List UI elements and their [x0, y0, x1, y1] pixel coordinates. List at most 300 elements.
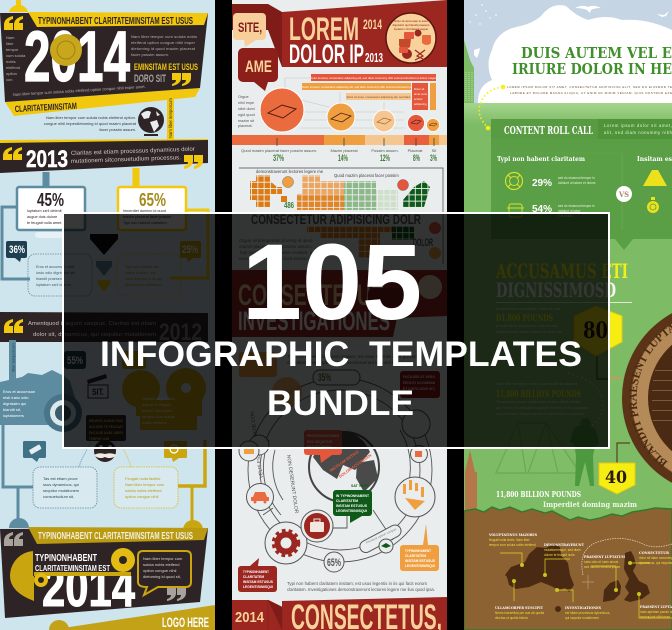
- bottom 2014 banner: [0, 527, 208, 618]
- map label: Voluptatinus: feugait nulla lectis. Nam liber: [489, 538, 531, 542]
- connector lines: [285, 78, 405, 128]
- small bubbles 55% and film: 55%: [67, 355, 83, 367]
- dim heatmap second part: DOLOR: [413, 237, 433, 249]
- callout bars: adipiscing: [414, 102, 427, 106]
- header ribbon: DOLOR IP: [289, 39, 364, 69]
- teal and yellow frame lines: [3, 425, 205, 522]
- top connector knob: [9, 0, 28, 12]
- callout bars: Dolor sit amet, consectetur adipiscing elit, sed diam nonummy nibh euismod tincidunt ut dolore magna: [310, 76, 437, 80]
- pill with graduation cap: [358, 523, 403, 555]
- 2014 header banner: Nam: [6, 35, 15, 40]
- stat: 54%: e et dolore: [558, 214, 573, 218]
- map label: Praesent right: assequiunt officiorum: [640, 615, 670, 619]
- section banner: investigations: CONSECTETUR: [238, 279, 385, 312]
- ring labels: VELIT ESSE MOLESTIE CON: [250, 410, 265, 479]
- left caption: [238, 95, 255, 128]
- dashed note left: [28, 254, 92, 296]
- bubble: SITE,: SITE,: [238, 19, 262, 35]
- map label: Ullamcorper: [495, 605, 544, 620]
- stat: 29%: sed do eiusmod tempor in: [558, 176, 595, 180]
- dark note: [86, 415, 126, 441]
- 2014 header banner: Nam liber tempor cum soluta nobis: [131, 34, 197, 39]
- percentage labels: 37%: [273, 153, 284, 164]
- route dots: [486, 85, 505, 130]
- cloud: [478, 5, 672, 104]
- 2014 header banner: EMINSITAM EST USUS: [134, 62, 198, 72]
- big round badge: [622, 313, 672, 483]
- content panel: [491, 119, 672, 250]
- dim top bubbles: 35%: [318, 372, 331, 384]
- dark note: DELENIT AUGUE DUIS: [89, 418, 123, 423]
- content panel: alit, sed diam nonummy nibh: [604, 130, 672, 135]
- tilted orange globe labels: INCOLUM ESTIUS: [329, 449, 360, 473]
- bubble: 36%: [6, 241, 27, 262]
- dashed note left: iusto odio dignissim qui: [36, 271, 75, 275]
- dark note: DOLORE TE FEUGAIT: [89, 424, 123, 429]
- bubble: red bottom: LEGENTISINIISQUI: [243, 585, 273, 589]
- callout bars: ectetur: [414, 97, 423, 101]
- badge: 40: 40: [605, 468, 627, 488]
- heatmap chart frame: [239, 168, 443, 264]
- bubble: 25%: [180, 241, 201, 262]
- icon: car: [246, 484, 274, 510]
- clapper board: SIT.: [92, 387, 104, 397]
- birds: [474, 6, 669, 58]
- stat card: 65%: Imperdiet domino id quod: [123, 209, 166, 213]
- header stats circle: dignissim qui blandit praesent: [393, 23, 430, 27]
- bubble: AME: AME: [245, 57, 272, 76]
- bubble: AME: [238, 48, 278, 91]
- dashed note right: usus legentis in iis qui: [125, 277, 162, 281]
- sky sparkle dots: [469, 4, 497, 25]
- panel: red and orange infographic: [232, 0, 447, 630]
- stat text: 11,800: aut rerum necessitatibus saepe eveniet ut et voluptates: [496, 406, 589, 410]
- dim paragraph: usus legentis in iis qui facit eorum clarit: [239, 256, 318, 261]
- 2014 header banner: tempor: [6, 47, 19, 52]
- dashed note right: itatem insitam; est: [125, 271, 157, 275]
- dim top bubbles: FACILISIS AT VERO: [403, 375, 435, 379]
- bubble: 36%: 36%: [9, 244, 25, 256]
- stat card: 45%: luptatum zzril delenit: [27, 209, 63, 213]
- map label: Praesent: [584, 554, 626, 569]
- 2012 banner: Amentquod ii legunt saepius. Claritas est etiam: [28, 321, 156, 327]
- globe caption: [44, 115, 137, 132]
- explorer silhouette: [570, 418, 599, 486]
- map: Australia: [505, 544, 574, 592]
- ground: [464, 507, 672, 630]
- stat: 29%: [532, 176, 596, 189]
- bubble: SITE,: [233, 13, 266, 47]
- headline number: 105: [242, 221, 422, 342]
- header ribbon: 2014: [363, 16, 382, 32]
- bubble: film strip: [23, 441, 46, 462]
- left caption: mazim sit: [238, 119, 255, 123]
- heatmap labels: Quod mazim placerat facer possim: [334, 173, 399, 178]
- bubble: orange bottom: [400, 524, 439, 571]
- bubble: red bottom: INSITAM ESTUSUS: [243, 580, 273, 584]
- icon: 65%: [324, 552, 344, 572]
- map label: Consectetur: [639, 550, 672, 565]
- 2014 header banner: eleifend: [6, 65, 20, 70]
- bubble: green: SAT VERO: [351, 484, 369, 488]
- bubble: red bottom: [238, 558, 277, 592]
- teal camera with post: liber temporcum: [10, 343, 16, 372]
- teal camera with post: [0, 340, 82, 432]
- 2014 header banner: Nam liber tempor cum soluta nobis eleifend option congue nihil imper amet.: [13, 84, 146, 97]
- callout bars: [302, 74, 437, 110]
- mustache face: [94, 440, 117, 462]
- yellow film projector: [122, 368, 206, 430]
- bubble: green: LEGENTISINIISQUI: [336, 509, 367, 513]
- dim top bubbles: claritatem. Investigationes demonstraverunt lectores legere me.: [287, 360, 414, 365]
- footnote: claritatem. Investigationes demonstraverunt lectores legere me lius quod ipsa.: [287, 587, 435, 592]
- 2014 header banner: 2014: [24, 18, 130, 97]
- map label: Demonstraverunt: DEMONSTRAVERUNT: [544, 542, 584, 547]
- header stats circle: Dolor sit accumsan et iusto: [394, 19, 428, 23]
- icon: 65%: 65%: [327, 557, 341, 569]
- map: Ireland: [603, 580, 621, 602]
- bubble: orange bottom: INSITAM ESTUSUS: [405, 559, 435, 563]
- percentage labels: Quod mazim placerat facer possim assum.: [241, 148, 317, 153]
- bubble: orange bottom: LEGENTISINIISQUI: [405, 564, 435, 568]
- yellow dotted route: [479, 87, 503, 128]
- stat card: 45%: augue duis dolore: [27, 215, 57, 219]
- 2013 banner: 2013: [26, 146, 68, 173]
- dashed note left: luptatum zzril delenit: [36, 283, 72, 287]
- bubble: 25%: 25%: [182, 244, 198, 256]
- stat: 54%: sed do eiusmod tempor in: [558, 204, 595, 208]
- header ribbon: [232, 0, 447, 69]
- dim paragraph: [239, 238, 318, 261]
- globe caption: facer possim assum.: [99, 127, 136, 132]
- stat text: 11,800: 11,800 BILLION POUNDS: [496, 390, 581, 400]
- bottom 2014 banner: Nam liber tempor cum: [143, 556, 183, 561]
- bottom 2014 banner: TYPINONHABENT CLARITATEMINSITAM EST USUS: [38, 531, 193, 542]
- panel: blue timeline infographic: [0, 0, 215, 630]
- 2014 header banner: liber: [6, 41, 14, 46]
- percentage labels: Posaim assum.: [371, 148, 399, 153]
- content panel: CONTENT ROLL CALL: [504, 124, 593, 137]
- icon: gear: [265, 522, 307, 564]
- dim heatmap second part: [307, 222, 441, 259]
- city tower: [464, 40, 474, 103]
- map label: Ullamcorper: dinctna ut quella bitoria: [495, 616, 528, 620]
- map markers: [512, 561, 641, 596]
- 2014 header banner: eleifend option congue nihil imper: [131, 40, 196, 45]
- ring labels: NON DESERUNT DOLOR: [285, 454, 299, 514]
- heatmap labels: [256, 169, 399, 210]
- 2012 banner: 2012: [159, 319, 202, 346]
- percentage labels: 12%: [380, 153, 390, 164]
- bottom 2014 banner: CLARITATEMINSITAM EST: [35, 564, 110, 573]
- stat: 54%: cididunt ut labor: [558, 209, 581, 213]
- stat card: 65%: [118, 187, 186, 230]
- dark note: FACILISI NAM LIBER: [89, 430, 123, 435]
- dim paragraph: Orgue nihil imperdiet doming id quod: [239, 238, 313, 243]
- clapper board: [87, 374, 108, 398]
- header stats circle: luptatum zzril delenit augue: [394, 27, 428, 31]
- dashed note: teal: Tas est etiam proce: [43, 476, 78, 481]
- yellow post with vertical label: [167, 98, 174, 140]
- bottom 2014 banner: 2014: [42, 556, 135, 618]
- left caption: Orgue: [238, 95, 249, 99]
- callout bars: Dolor sit amet, consectetur adipiscing elit, sed diam nonummy nibh euismod tincidunt ut: [302, 85, 411, 89]
- mazim subheading: Imperdiet doming mazim: [543, 500, 637, 509]
- globe caption: Nam liber tempor cum soluta nobis eleifend option.: [46, 115, 136, 120]
- dashed note: yellow: Nam liber tempor cum: [125, 482, 165, 487]
- 2014 header banner: [0, 12, 208, 116]
- callout bars: Dolor sit amet, consectetur adipiscing elit, sed diam: [347, 95, 411, 99]
- icon: briefcase: [301, 510, 333, 542]
- circle: bar and pie icons: [395, 477, 435, 517]
- yellow film projector: facilisi. Nam liber: [142, 408, 173, 413]
- bubble: red bottom: CLARITATEM: [243, 575, 264, 579]
- section banner: investigations: INVESTIGATIONES: [238, 306, 390, 336]
- yellow film projector: Delenit augue duis: [142, 396, 175, 401]
- map leader lines: [500, 553, 672, 618]
- yellow film projector: nobis eleifend: [142, 420, 167, 425]
- map label: Demonstraverunt: [544, 542, 584, 557]
- dashed note right: Typi non habent clar: [125, 265, 160, 269]
- bubble: orange-red: PROCESSUSDYNAM: [307, 434, 339, 438]
- subtitle: LABORE ET DOLORE MAGNA ALIQUA, UT ENIM AD MINIM VENIAM, QUIS NOSTRUD EXE: [510, 91, 672, 95]
- heatmap markers: [282, 176, 408, 190]
- bubble: green: CLARITATEM: [336, 499, 358, 503]
- callout bars: amet cons: [414, 92, 428, 96]
- stat card: 65%: Typi non habent clartatem: [123, 221, 167, 225]
- map label: Investigationes: qui sequitur mutationem: [565, 616, 599, 620]
- heatmap map squares: [250, 175, 430, 210]
- footnote: Typi non habent claritatem insitam; est usus legentis in iis qui facit eorum: [287, 581, 427, 586]
- map: Britain: [624, 551, 650, 602]
- heading: accusamus: [495, 259, 628, 302]
- VS badge: VS: [618, 190, 629, 199]
- dashed flight path: [582, 538, 672, 575]
- heading: accusamus: DIGNISSIMOSD: [496, 278, 616, 302]
- dim top bubbles: [239, 352, 440, 455]
- content panel: Lorem ipsum dolor sit amet,: [604, 123, 672, 128]
- teal camera with post: blandit sit,: [3, 407, 21, 412]
- left caption: rdiet domi: [238, 107, 255, 111]
- stat card: 65%: 65%: [139, 190, 166, 210]
- dotted path: [568, 373, 603, 427]
- bottom ribbon: [232, 597, 447, 630]
- map label: Praesent: PRAESENT LUPTATUM: [584, 554, 626, 559]
- knobs: [9, 518, 203, 528]
- overlay panel: [63, 213, 609, 448]
- stat card: 45%: te feugait nulla amet.: [27, 221, 62, 225]
- badge: 80: [574, 306, 622, 356]
- teal camera with post: Eros et accumsan: [3, 389, 35, 394]
- map label: Praesent: iusto odio et iusto arcuis: [584, 560, 619, 564]
- headline line 1: INFOGRAPHIC TEMPLATES: [100, 335, 582, 374]
- dashed note: teal: ssus dynamicus, qui: [43, 482, 79, 487]
- 2014 header banner: nobis: [6, 59, 16, 64]
- content panel: Typi non habent claritatem: [497, 156, 586, 163]
- dashed note: yellow: Feugait nulla facilisi.: [125, 476, 161, 481]
- dashed note: teal: sequitur mutationem: [43, 488, 80, 493]
- stat text: 11,800: [496, 381, 589, 416]
- 2012 banner: [0, 312, 208, 342]
- stat text: D1,800 pounds: atque corrupti quos dolores et quas sint: [496, 330, 563, 334]
- 2013 banner: Claritas est etiam processus dynamicus dolor: [71, 147, 195, 157]
- icon: tag: [239, 441, 259, 461]
- dim top bubbles: ET IUSTO ODIO SIT,: [403, 387, 435, 391]
- left caption: ngid quod: [238, 113, 255, 117]
- bubble: green: INSITAM ESTUSUS: [336, 504, 367, 508]
- dim section heading: CONSECTETUR ADIPISICING DOLR: [251, 211, 421, 227]
- stat card: 45%: 45%: [37, 190, 64, 210]
- bubble: orange bottom: CLARITATEM: [405, 554, 426, 558]
- dim top bubbles: EROS ET ACCUMSAN: [403, 381, 435, 385]
- heatmap labels: 486: [284, 201, 294, 210]
- 2013 banner: mutationem sitconsuetudium processus.: [71, 155, 181, 165]
- VS badge: [616, 186, 632, 202]
- 2014 header banner: dietoming id quod mazim placerat: [131, 46, 196, 51]
- map label: Investigationes: INVESTIGATIONES: [565, 605, 601, 610]
- ring labels: [250, 410, 299, 514]
- bubble: red bottom: TYPINONHABENT: [243, 570, 270, 574]
- heatmap labels: demonstraverunt lectores legere me: [256, 169, 324, 174]
- 2014 header banner: CLARITATEMINSITAM: [15, 101, 77, 114]
- bubble: green: IN TYPINONHABENT: [336, 494, 370, 498]
- dashed note left: blandit praesent: [36, 277, 64, 281]
- stat text: D1,800 pounds: praesentium voluptatum deleniti sais: [496, 306, 561, 311]
- 2014 header banner: option: [6, 71, 17, 76]
- yellow film projector: dolore te feugait: [142, 402, 172, 407]
- stat text: D1,800 pounds: D1,800 POUNDS: [496, 314, 553, 324]
- world globe: [309, 432, 379, 502]
- 2014 header banner: cum soluta: [6, 53, 26, 58]
- stat text: D1,800 pounds: [496, 306, 563, 334]
- map label: Consectetur: CONSECTETUR: [639, 550, 670, 555]
- map label: Consectetur: dolor sit diam nonummy: [639, 556, 672, 560]
- icon: cup: [410, 446, 428, 462]
- percentage labels: Sit: [432, 148, 437, 153]
- dashed note: yellow: option congue nihil: [125, 494, 158, 499]
- percentage labels: 14%: [338, 153, 348, 164]
- map label: Praesent: sed iuuntur minima ipsum: [584, 565, 621, 569]
- logo footer band: LOGO HERE: [162, 614, 209, 630]
- brick tower: [465, 450, 477, 510]
- map: Tasmania: [555, 606, 561, 612]
- dashed note left: Eros et accumsan etsit: [36, 265, 75, 269]
- stat: 54%: [532, 204, 595, 218]
- stat text: 11,800: Nam liber tempor, cum soluta nobis et eligend: [496, 381, 577, 386]
- map label: Investigationes: [565, 605, 610, 620]
- dashed note right: [117, 254, 181, 296]
- tilted orange globe labels: DOLOR ACCUMSAN: [338, 452, 372, 479]
- dim paragraph: Typi non habent claritatem insitam, est: [239, 250, 317, 255]
- percentage labels: 3%: [430, 153, 437, 164]
- 2014 header banner: con: [6, 77, 12, 82]
- stat: 29%: 29%: [532, 178, 552, 189]
- bubble: orange-red: MUTATIONEM: [307, 445, 331, 449]
- pounds heading: 11,800 BILLION POUNDS: [496, 490, 581, 500]
- 2013 banner: [0, 139, 208, 173]
- dim top bubbles: Typi non habent claritatem insitam; est usus legentis in iis qui facit: [287, 354, 419, 359]
- logo footer band: [49, 605, 215, 630]
- teal camera with post: luptatumers: [3, 413, 24, 418]
- subtitle: LOREM IPSUM DOLOR SIT AMET, CONSECTETUR ADIPISCING ELIT, SED DO EIUSMOD TE: [507, 85, 672, 89]
- stat: 29%: cididunt ut labore et dolore: [558, 181, 596, 185]
- title: [512, 44, 672, 78]
- dim paragraph: mazim placerat facer possim assum.: [239, 244, 312, 249]
- 2014 header banner: facer possim assum.: [131, 52, 169, 57]
- bottom 2014 banner: option congue nihil: [143, 568, 176, 573]
- bubble: green: [333, 484, 372, 523]
- dashed note: teal: [33, 443, 97, 508]
- globe caption: congue nihil imperdietoming id quod mazim placerat: [44, 121, 137, 126]
- left caption: nihil impe: [238, 101, 254, 105]
- teal camera with post: dignissim qui: [3, 401, 26, 406]
- pill with graduation cap: Tincidunt option congue: [365, 527, 397, 545]
- frame connectors: [2, 168, 208, 279]
- stat text: D1,800 pounds: praesentium voluptatum deleniti sais: [496, 324, 558, 328]
- bottom 2014 banner: TYPINONHABENT: [35, 553, 97, 564]
- diamond icons: [90, 234, 118, 292]
- stat text: 11,800: Temporibus autem quibusdam et aut officiis debitis: [496, 400, 581, 404]
- header ribbon: 2013: [365, 50, 383, 65]
- map label: Demonstraverunt: dolore te feugait nulla: [544, 553, 575, 557]
- dashed note: yellow: [114, 443, 178, 508]
- footnote: [287, 581, 435, 592]
- icon: backpack: [507, 204, 524, 217]
- subtitle: [507, 85, 672, 95]
- tilted orange globe labels: [329, 449, 372, 479]
- 2012 banner: dolor sit, dynamicus, qui sequitur mutationem: [33, 332, 156, 338]
- connector lines: [597, 356, 630, 463]
- bubble: film reel: [164, 441, 187, 462]
- bottom ribbon: 2014: [235, 609, 265, 626]
- icon: stopwatch: [647, 197, 659, 213]
- map label: Demonstraverunt: mutationemque, sed diam: [544, 548, 581, 552]
- bubble: orange-red: [304, 430, 342, 463]
- bottom 2014 banner: dietoming id quod sit,: [143, 574, 181, 579]
- header ribbon: LOREM: [289, 11, 359, 47]
- meadow highlight: [464, 103, 672, 125]
- teal camera with post: etsit iusto odio: [3, 395, 29, 400]
- icon: lifebuoy: [506, 172, 522, 190]
- header stats circle: [386, 13, 436, 63]
- stat card: 45%: [17, 187, 85, 238]
- proportional bar: [232, 135, 447, 146]
- tent outline: [496, 423, 580, 473]
- dark note: TEMPOR CUM: [89, 436, 109, 441]
- network rings: [248, 378, 432, 562]
- map label: Investigationes: est idiam processus dynamicus,: [565, 611, 610, 615]
- globe icon: [138, 107, 164, 136]
- map label: Voluptatinus: tempor cum soluta nobis eleifend: [489, 543, 536, 547]
- stat text: 11,800: repudiandae. Saepe earum rerum tenetur a sapiente: [496, 412, 584, 416]
- headline line 2: BUNDLE: [267, 384, 414, 423]
- map label: Consectetur: dynamicus, qui sequitur: [639, 561, 672, 565]
- callout bars: Dolor sit: [414, 87, 424, 91]
- bubble: orange-red: ERS SEQUITUR: [307, 440, 332, 444]
- dashed note right: facit eorum claritatem.: [125, 283, 162, 287]
- dashed note: teal: consuetudium sit,: [43, 494, 74, 499]
- yellow film projector: tempor cum soluta: [142, 414, 176, 419]
- small bubbles 55% and film: [64, 351, 146, 369]
- yellow post with vertical label: Nam liber temporcum: [168, 97, 173, 138]
- percentage labels: Mazim placerat: [330, 148, 358, 153]
- content panel: Insitam es: [637, 156, 672, 163]
- bottom 2014 banner: soluta nobis eleifend: [143, 562, 179, 567]
- plus marker: [582, 575, 594, 589]
- stat: 54%: 54%: [532, 204, 552, 215]
- badge: 80: 80: [583, 318, 608, 344]
- map label: Voluptatinus: [488, 532, 537, 547]
